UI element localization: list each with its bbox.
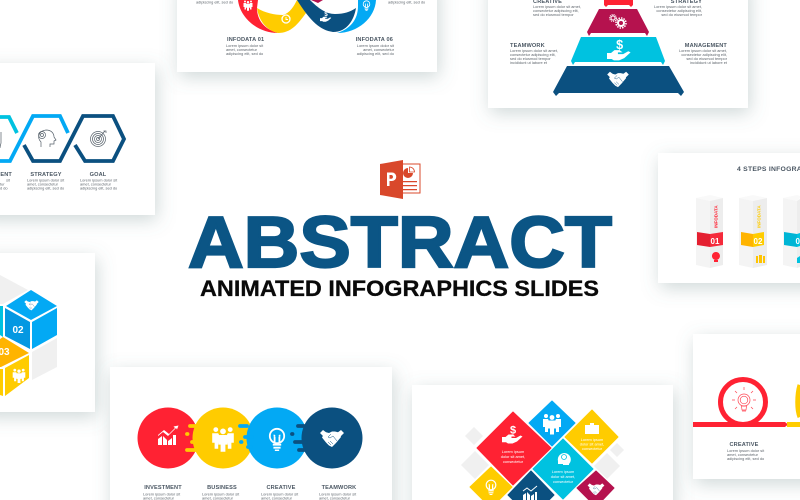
- panel: loop card: [693, 334, 800, 479]
- text: infodata 06: [356, 37, 395, 56]
- panel: 4 steps card: [658, 153, 800, 283]
- step 3 column: [783, 195, 800, 268]
- text: infodata 01: INFODATA 01: [227, 37, 264, 43]
- gray hexagon faces: [0, 275, 57, 380]
- yellow diamond upper right: [565, 410, 618, 463]
- red diamond: [477, 412, 551, 485]
- text: management: MANAGEMENT: [685, 43, 727, 49]
- step 2 column: [739, 195, 767, 268]
- text: teamwork: consectetur adipiscing elit,: [510, 52, 556, 57]
- text: business: BUSINESS: [207, 485, 237, 491]
- text: infodata 01: [226, 37, 264, 56]
- crimson diamond: [577, 471, 614, 500]
- blue cube: 02: [12, 325, 24, 336]
- subtitle: ANIMATED INFOGRAPHICS SLIDES: [200, 276, 599, 301]
- text: teamwork: incididunt ut labore et: [510, 60, 548, 65]
- cyan diamond: consectetur: [553, 479, 574, 484]
- red diamond: consectetur: [503, 459, 524, 464]
- text: management fragment: tur: [0, 182, 5, 186]
- title: ABSTRACT: [188, 203, 612, 283]
- blue diamond: [529, 401, 575, 446]
- panel: hexagon card: [0, 63, 155, 215]
- text: goal: Lorem ipsum dolor sit: [80, 178, 118, 182]
- icon: growth chart: [158, 426, 178, 445]
- pyramid navy tier: [553, 66, 684, 96]
- icon: target: [90, 131, 106, 146]
- blue circle: [246, 408, 308, 468]
- icon: bulb: [270, 429, 284, 451]
- text: infodata 01: adipiscing elit, sed do: [226, 51, 263, 56]
- text: teamwork: sed do eiusmod tempor: [510, 56, 551, 61]
- text: teamwork: [510, 43, 558, 65]
- text: teamwork: Lorem ipsum dolor sit amet,: [510, 48, 558, 53]
- text: strategy: consectetur adipiscing elit,: [656, 8, 702, 13]
- hexagon chain: [0, 116, 124, 161]
- text: investment: [143, 485, 182, 500]
- red loop line: [693, 380, 788, 427]
- text: creative: CREATIVE: [729, 442, 759, 448]
- text: infodata 06: Lorem ipsum dolor sit: [357, 43, 395, 48]
- icon: head with gear: [0, 130, 56, 148]
- text: goal: amet, consectetur: [80, 182, 112, 186]
- text: creative: [261, 485, 299, 500]
- text: infodata 01: Lorem ipsum dolor sit: [226, 43, 264, 48]
- panel: infinity loop card: [177, 0, 437, 72]
- cyan diamond: [533, 439, 593, 499]
- step 2 column: 02: [754, 237, 763, 246]
- text: management: sed do eiusmod tempor: [686, 56, 728, 61]
- red diamond: dolor sit amet,: [501, 454, 525, 459]
- step 1 column: INFODATA: [714, 205, 718, 228]
- text: creative: amet, consectetur: [727, 452, 759, 457]
- yellow diamond upper right: consectetur: [582, 446, 603, 451]
- text: creative: CREATIVE: [266, 485, 296, 491]
- text: management: Lorem ipsum dolor sit amet,: [679, 48, 727, 53]
- text: strategy: Lorem ipsum dolor sit: [27, 178, 65, 182]
- text: investment: INVESTMENT: [144, 485, 182, 491]
- yellow diamond upper right: dolor sit amet,: [580, 442, 604, 446]
- step 2 column: INFODATA: [756, 205, 762, 228]
- text: strategy: [27, 172, 65, 190]
- text: management: consectetur adipiscing elit,: [681, 52, 727, 57]
- text: teamwork: TEAMWORK: [510, 43, 545, 49]
- icon: people: [212, 427, 234, 452]
- navy diamond: [508, 471, 554, 500]
- icon: handshake: [320, 430, 344, 447]
- text: creative: [727, 442, 765, 461]
- cyan diamond: dolor sit amet,: [551, 474, 575, 479]
- text: management: incididunt ut labore et: [690, 60, 728, 65]
- text: business: [202, 485, 240, 500]
- text: creative: [533, 0, 581, 17]
- panel: pyramid card: [488, 0, 748, 108]
- navy circle: [302, 408, 362, 468]
- blue cube: [5, 290, 57, 349]
- text: management fragment: sit: [6, 178, 11, 182]
- yellow diamond upper right: Lorem ipsum: [581, 437, 603, 442]
- text: goal: [80, 172, 118, 190]
- text: strategy: amet, consectetur: [27, 182, 59, 186]
- text: management: [679, 43, 728, 65]
- connector stripes: [187, 426, 306, 450]
- red circle: [138, 408, 198, 468]
- text: infodata 06: adipiscing elit, sed do: [357, 51, 394, 56]
- gray diamonds: [461, 427, 624, 479]
- text: business: Lorem ipsum dolor sit: [202, 492, 240, 496]
- yellow cube: [0, 337, 29, 396]
- step 1 column: [696, 195, 723, 268]
- cyan sliver: [0, 306, 3, 337]
- text: creative: Lorem ipsum dolor sit: [727, 448, 765, 453]
- cyan diamond: Lorem ipsum: [552, 469, 574, 474]
- text: goal: GOAL: [90, 172, 107, 178]
- text: strategy: STRATEGY: [30, 172, 62, 178]
- yellow loop line: [787, 385, 800, 424]
- text: teamwork: [319, 485, 357, 500]
- red diamond: Lorem ipsum: [502, 449, 524, 454]
- panel: circles card: [110, 367, 392, 500]
- text: creative: Lorem ipsum dolor sit: [261, 492, 299, 496]
- text: infodata 01: amet, consectetur: [226, 47, 258, 52]
- pyramid crimson tier: [587, 9, 649, 36]
- icon: bulb outline: [732, 387, 756, 411]
- pyramid cyan tier: [571, 37, 665, 65]
- text: teamwork: Lorem ipsum dolor sit: [319, 492, 357, 496]
- infinity loop chart: [238, 0, 376, 33]
- text: infodata 06: INFODATA 06: [356, 37, 393, 43]
- pyramid red tier: [604, 0, 633, 7]
- text: goal: adipiscing elit, sed do: [80, 186, 117, 190]
- text: infodata 06: amet, consectetur: [363, 47, 395, 52]
- text: investment: Lorem ipsum dolor sit: [143, 492, 181, 496]
- panel: isometric cube card: [0, 253, 95, 412]
- text: creative: consectetur adipiscing elit,: [533, 8, 579, 13]
- text: management fragment: [0, 172, 12, 190]
- text: creative: sed do eiusmod tempor: [533, 12, 574, 17]
- icon: powerpoint logo: [380, 160, 420, 199]
- yellow circle: [192, 408, 254, 468]
- panel: diamonds card: [412, 385, 673, 500]
- text: creative: Lorem ipsum dolor sit amet,: [533, 4, 581, 9]
- text: strategy: sed do eiusmod tempor: [661, 12, 703, 17]
- text: strategy: Lorem ipsum dolor sit amet,: [654, 4, 702, 9]
- yellow diamond lower left: [470, 467, 512, 500]
- step 1 column: 01: [711, 237, 720, 246]
- text: strategy: [654, 0, 703, 17]
- text: teamwork: TEAMWORK: [322, 485, 356, 491]
- text: creative: adipiscing elit, sed do: [727, 456, 764, 461]
- text: strategy: adipiscing elit, sed do: [27, 186, 64, 190]
- text: management fragment: d do: [0, 186, 8, 190]
